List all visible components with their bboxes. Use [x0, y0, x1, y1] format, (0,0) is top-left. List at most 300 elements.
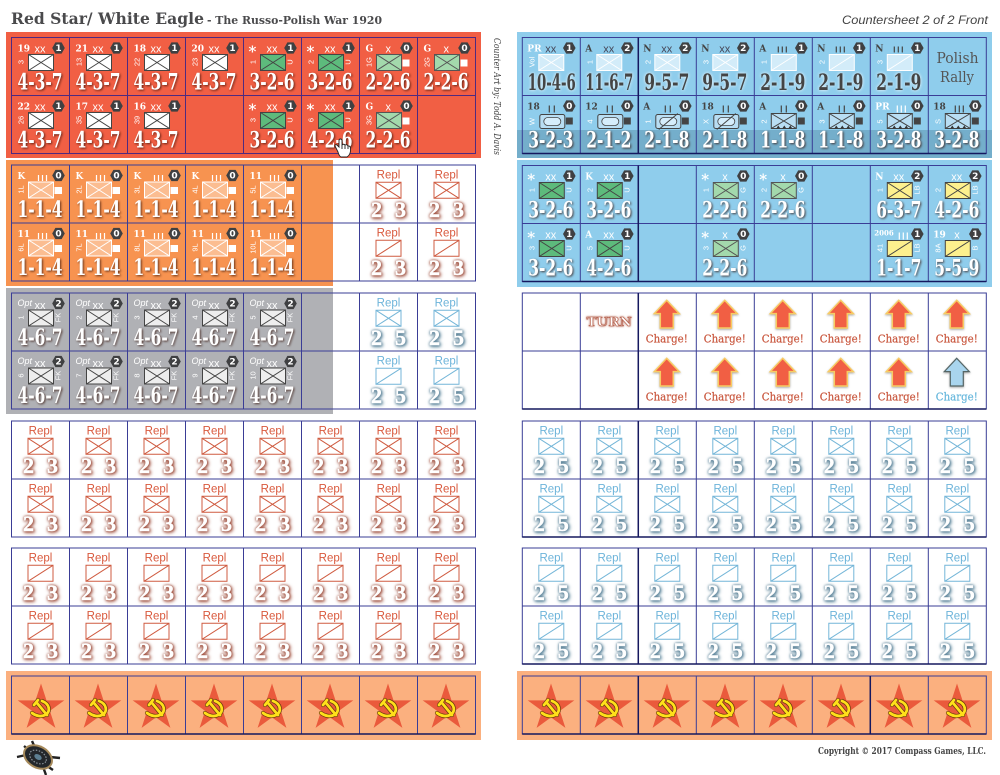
- counter: Opt 8: 2: [171, 358, 178, 368]
- counter: G 2G 2-2-6: 2G: [422, 57, 432, 67]
- counter: Polish Rally: Rally: [940, 68, 974, 86]
- panel: blue replacement counters, X box: 25: [766, 511, 801, 536]
- counter: A 5 4-2-6: 4-2-6: [586, 256, 631, 282]
- panel: blue replacement counters, X box: Repl: [539, 426, 563, 438]
- panel: blue replacement counters, slash box: Repl: [539, 552, 563, 564]
- counter: star 1 3-2-6: 3-2-6: [528, 198, 573, 224]
- marker: charge: [820, 300, 862, 346]
- counter: Opt 2: 2: [113, 300, 120, 310]
- panel: red replacement counters, slash box: 23: [139, 638, 174, 663]
- marker: charge: Charge!: [936, 333, 978, 346]
- sheet label: Countersheet 2 of 2 Front: [842, 13, 989, 27]
- counter: G 2G 2-2-6: x: [444, 44, 450, 56]
- counter: 11 9L: 1-1-4: [192, 255, 236, 281]
- counter: star 3 3-2-6: 1: [287, 102, 294, 112]
- counter: K 1L: 0: [55, 172, 62, 182]
- panel: red replacement counters, slash box: 23: [313, 580, 348, 605]
- counter: Opt 8: 4-6-7: [134, 383, 178, 409]
- panel: blue replacement counters, X box: 25: [708, 511, 743, 536]
- counter: 22 xx 4-3-7: 1: [55, 102, 62, 112]
- counter: K 4L: 4L: [190, 185, 200, 194]
- marker: charge: [762, 358, 804, 404]
- counter: G 3G 2-2-6: x: [386, 102, 392, 114]
- panel: red replacement counters, X box: Repl: [261, 426, 284, 438]
- counter: Opt 9: Opt: [192, 356, 207, 366]
- counter: 17 xx 4-3-7: 35: [74, 116, 84, 124]
- panel: red replacement counters, slash box: 23: [81, 580, 116, 605]
- counter: Opt 2: 2: [74, 315, 84, 320]
- panel: red replacement counters, X box: Repl: [261, 484, 284, 496]
- counter: star 6 4-2-6: [306, 100, 355, 154]
- panel: red replacement counters, X box: 23: [429, 453, 464, 478]
- counter: Opt 5: Opt: [250, 298, 265, 308]
- counter: G 2G 2-2-6: G: [424, 44, 431, 54]
- counter: 19 8A B 5-5-9: 8A: [933, 243, 942, 253]
- counter: A 2 1-1-8: A: [758, 102, 767, 112]
- counter: G 1G 2-2-6: [364, 42, 413, 96]
- counter: Opt 1: xx: [34, 300, 46, 312]
- counter: 11 10L: 1-1-4: [250, 255, 294, 281]
- counter: 17 xx 4-3-7: 4-3-7: [76, 128, 120, 154]
- counter: star 2 3-2-6: [306, 42, 355, 96]
- counter: Opt 7: [74, 356, 123, 409]
- panel: blue replacement counters, slash box: 25: [824, 638, 859, 663]
- counter: A 1 2-1-8: [642, 100, 692, 154]
- counter: A 1 2-1-8: A: [642, 102, 651, 112]
- counter: Opt 8: FK: [170, 371, 178, 380]
- counter: PR Vol 10-4-6: Vol: [527, 56, 536, 67]
- counter: star x 2 2-2-6: [759, 170, 808, 224]
- counter: 18 S 3-2-8: 18: [933, 102, 946, 112]
- counter: star 3 3-2-6: xx: [266, 102, 278, 114]
- panel: blue replacement counters, X box: Repl: [597, 426, 621, 438]
- artist credit: Counter Art by: Todd A. Davis: [491, 38, 502, 155]
- counter: N 1 LB 6-3-7: LB: [912, 185, 921, 195]
- panel: red replacement counters, X box: 23: [313, 511, 348, 536]
- counter: 18 xx 4-3-7: [132, 42, 181, 96]
- counter: 11 6L: 6L: [16, 243, 26, 252]
- counter: 2 LB 4-2-6: 2: [972, 172, 978, 182]
- counter: N 3 2-1-9: 1: [914, 44, 920, 54]
- counter: PR 5 3-2-8: 5: [875, 119, 884, 124]
- counter: PR 5 3-2-8: 0: [914, 102, 920, 112]
- counter: A 3 1-1-8: [816, 100, 866, 154]
- counter: A 2 1-1-8: 0: [798, 102, 804, 112]
- counter: 11 7L: 0: [113, 230, 120, 240]
- marker: charge: Charge!: [762, 391, 804, 404]
- panel: blue replacement counters, X box: Repl: [655, 484, 679, 496]
- counter: G 3G 2-2-6: 2-2-6: [366, 128, 410, 154]
- panel: red replacement counters, X box: 23: [23, 511, 58, 536]
- counter: star x 2 2-2-6: 2: [759, 188, 768, 192]
- panel: blue replacement counters, slash box: 25: [592, 638, 627, 663]
- counter: 11 6L: 11: [18, 230, 30, 240]
- counter: 19 xx 4-3-7: 4-3-7: [18, 70, 62, 96]
- counter: K 1L: 1L: [16, 185, 26, 194]
- counter: star x 3 2-2-6: 2-2-6: [702, 256, 747, 282]
- counter: PR Vol 10-4-6: [527, 42, 576, 96]
- panel: red replacement counters, X box: Repl: [87, 484, 110, 496]
- counter: 16 xx 4-3-7: 4-3-7: [134, 128, 178, 154]
- counter: star x 2 2-2-6: x: [780, 172, 786, 184]
- panel: red replacement counters, X box: 23: [197, 453, 232, 478]
- counter: 18 xx 4-3-7: xx: [150, 44, 162, 56]
- counter: star x 1 2-2-6: x: [722, 172, 728, 184]
- counter: N 2 2-1-9: 1: [856, 44, 862, 54]
- counter: star 1 3-2-6: U: [564, 187, 573, 193]
- panel: red replacement counters, X box: 23: [81, 511, 116, 536]
- counter: Opt 3: xx: [150, 300, 162, 312]
- marker: charge: Charge!: [820, 333, 862, 346]
- panel: red replacement counters, slash box: 23: [313, 638, 348, 663]
- counter: A 5 4-2-6: 1: [624, 230, 630, 240]
- panel: blue replacement counters, slash box: Repl: [829, 610, 853, 622]
- counter: 21 xx 4-3-7: 21: [76, 44, 88, 54]
- counter: 16 xx 4-3-7: xx: [150, 102, 162, 114]
- panel: blue replacement counters, X box: 25: [766, 453, 801, 478]
- counter: star 1 3-2-6: [527, 170, 576, 224]
- counter: 21 xx 4-3-7: 13: [74, 58, 84, 66]
- counter: 20 xx 4-3-7: 20: [192, 44, 204, 54]
- counter: K 2L: [74, 170, 123, 223]
- panel: blue replacement counters, slash box: Repl: [945, 610, 969, 622]
- marker: blue charge: Charge!: [936, 391, 978, 404]
- counter: 11 6L: 0: [55, 230, 62, 240]
- counter: star 1 3-2-6: 3-2-6: [250, 70, 294, 96]
- panel: red replacement counters, slash box: Repl: [319, 552, 342, 564]
- counter: star 3 3-2-6: 3: [248, 118, 258, 122]
- panel: red replacement counters, X box: 23: [139, 453, 174, 478]
- panel: blue replacement counters, X box: Repl: [887, 484, 911, 496]
- counter: 11 10L: 10L: [248, 241, 258, 254]
- counter: K 4L: 0: [229, 172, 236, 182]
- counter: N 1 LB 6-3-7: [875, 170, 924, 224]
- marker: charge: Charge!: [762, 333, 804, 346]
- counter: N 3 9-5-7: [701, 42, 750, 96]
- panel: blue replacement counters, X box: 25: [592, 511, 627, 536]
- counter: Opt 3: FK: [170, 313, 178, 322]
- panel: blue replacement counters, X box: Repl: [539, 484, 563, 496]
- counter: K 3L: 3L: [132, 185, 142, 194]
- counter: A 1 2-1-9: 1: [759, 60, 768, 64]
- counter: N 1 LB 6-3-7: 1: [875, 188, 884, 192]
- panel: red replacement counters, X box: Repl: [29, 484, 52, 496]
- panel: red replacement counters, X box: 23: [139, 511, 174, 536]
- counter: 18 X 2-1-8: [701, 100, 750, 154]
- panel: red replacement counters, slash box: 23: [255, 580, 290, 605]
- counter: 11 9L: 0: [229, 230, 236, 240]
- counter: K 2L: K: [76, 172, 84, 182]
- panel: blue replacement counters, X box: 25: [824, 453, 859, 478]
- counter: star 3 3-2-6: *: [248, 100, 256, 118]
- panel: blue replacement counters, X box: Repl: [713, 484, 737, 496]
- counter: blue replacement slash 2 5: Repl: [377, 356, 400, 368]
- counter: G 1G 2-2-6: 2-2-6: [366, 70, 410, 96]
- counter: star 1 3-2-6: 1: [248, 60, 258, 64]
- marker: turn: TURN: [587, 315, 632, 329]
- panel: blue replacement counters, slash box: 25: [534, 580, 569, 605]
- panel: blue Polish counters, top: [517, 32, 992, 158]
- panel: red replacement counters, X box: Repl: [435, 484, 458, 496]
- panel: blue replacement counters, X box: 25: [940, 453, 975, 478]
- counter: K 3L: 0: [171, 172, 178, 182]
- panel: red replacement counters, slash box: Repl: [261, 552, 284, 564]
- counter: 18 W 3-2-3: 3-2-3: [528, 128, 573, 154]
- panel: red replacement counters, slash box: Repl: [145, 552, 168, 564]
- counter: star x 3 2-2-6: 3: [701, 246, 710, 250]
- panel: blue replacement counters, slash box: 25: [708, 638, 743, 663]
- counter: Opt 2: FK: [112, 313, 120, 322]
- counter: 11 5L: [248, 170, 297, 223]
- counter: Opt 6: xx: [34, 358, 46, 370]
- panel: red replacement counters, X box: Repl: [435, 426, 458, 438]
- panel: blue replacement counters, slash box: Repl: [887, 610, 911, 622]
- counter: star 1 3-2-6: 1: [527, 188, 536, 192]
- counter: Opt 4: xx: [208, 300, 220, 312]
- counter: A 1 2-1-9: A: [758, 44, 767, 54]
- counter: K 2L: 0: [113, 172, 120, 182]
- counter: N 2 2-1-9: N: [817, 44, 826, 54]
- counter: 18 X 2-1-8: 0: [740, 102, 746, 112]
- counter: star 1 3-2-6: 1: [287, 44, 294, 54]
- counter: Opt 9: 9: [190, 373, 200, 378]
- counter: PR 5 3-2-8: [875, 100, 924, 154]
- counter: star x 2 2-2-6: *: [759, 170, 767, 188]
- counter: N 3 2-1-9: 2-1-9: [876, 70, 921, 96]
- panel: red replacement counters, X box: 23: [313, 453, 348, 478]
- counter: PR Vol 10-4-6: 1: [566, 44, 572, 54]
- title: - The Russo-Polish War 1920: [207, 14, 382, 27]
- counter: N 3 9-5-7: 3: [701, 60, 710, 64]
- counter: 20 xx 4-3-7: 4-3-7: [192, 70, 236, 96]
- counter: G 1G 2-2-6: x: [386, 44, 392, 56]
- counter: star x 1 2-2-6: *: [701, 170, 709, 188]
- counter: 11 8L: [132, 228, 181, 281]
- counter: 2 LB 4-2-6: 4-2-6: [934, 198, 979, 224]
- panel: red replacement counters, X box: Repl: [377, 426, 400, 438]
- panel: blue replacement counters, slash box: 25: [766, 580, 801, 605]
- counter: K 2L: 2L: [74, 185, 84, 194]
- counter: A 5 4-2-6: [584, 228, 634, 282]
- counter: 11 7L: 1-1-4: [76, 255, 120, 281]
- panel: blue replacement counters, X box: 25: [940, 511, 975, 536]
- panel: blue replacement counters, slash box: 25: [882, 638, 917, 663]
- counter: Opt 4: 4: [190, 315, 200, 320]
- panel: red replacement counters, slash box: Repl: [203, 610, 226, 622]
- counter: star x 3 2-2-6: G: [738, 245, 747, 251]
- counter: 21 xx 4-3-7: 1: [113, 44, 120, 54]
- marker: charge: [646, 358, 688, 404]
- panel: blue replacement counters, X box: [522, 421, 986, 537]
- panel: blue replacement counters, slash box: 25: [650, 638, 685, 663]
- panel: blue replacement counters, X box: Repl: [945, 426, 969, 438]
- counter: A 3 1-1-8: 1-1-8: [818, 128, 863, 154]
- panel: blue replacement counters, X box: Repl: [945, 484, 969, 496]
- counter: 18 X 2-1-8: 2-1-8: [702, 128, 747, 154]
- counter: 22 xx 4-3-7: 4-3-7: [18, 128, 62, 154]
- counter: 19 8A B 5-5-9: 1: [972, 230, 978, 240]
- counter: 19 xx 4-3-7: 19: [18, 44, 30, 54]
- counter: K 4L: [190, 170, 239, 223]
- counter: Opt 7: FK: [112, 371, 120, 380]
- counter: 19 xx 4-3-7: xx: [34, 44, 46, 56]
- counter: 2 LB 4-2-6: [933, 170, 982, 224]
- panel: blue replacement counters, slash box: Repl: [597, 610, 621, 622]
- panel: red replacement counters, slash box: 23: [23, 580, 58, 605]
- counter: 19 8A B 5-5-9: B: [970, 245, 979, 251]
- marker: charge: [704, 358, 746, 404]
- counter: A 1 2-1-8: 0: [682, 102, 688, 112]
- panel: blue replacement counters, slash box: Repl: [945, 552, 969, 564]
- counter: N 1 LB 6-3-7: 2: [914, 172, 920, 182]
- counter: Opt 3: 2: [171, 300, 178, 310]
- counter: N 3 9-5-7: 9-5-7: [702, 70, 747, 96]
- counter: N 2 2-1-9: 2: [817, 60, 826, 64]
- counter: Opt 8: 8: [132, 373, 142, 378]
- counter: 18 W 3-2-3: W: [527, 117, 536, 125]
- counter: Polish Rally: [936, 49, 979, 86]
- counter: 17 xx 4-3-7: xx: [92, 102, 104, 114]
- counter: 11 7L: [74, 228, 123, 281]
- counter: Opt 6: 4-6-7: [18, 383, 62, 409]
- counter: 2 LB 4-2-6: LB: [970, 185, 979, 195]
- counter: star x 3 2-2-6: 0: [740, 230, 746, 240]
- counter: replacement 2 3: [429, 170, 464, 222]
- counter: replacement 2 3: Repl: [435, 170, 458, 182]
- counter: blue replacement 2 5: 25: [371, 325, 406, 350]
- panel: red star markers, right: [517, 671, 992, 740]
- counter: Opt 6: [16, 356, 65, 409]
- counter: A 1 11-6-7: 11-6-7: [585, 70, 633, 96]
- counter: Opt 6: FK: [54, 371, 62, 380]
- counter: Opt 1: FK: [54, 313, 62, 322]
- counter: star 3 3-2-6: [527, 228, 576, 282]
- counter: Opt 5: 4-6-7: [250, 325, 294, 351]
- counter: star x 1 2-2-6: G: [738, 187, 747, 193]
- counter: A 1 11-6-7: [584, 42, 634, 96]
- panel: blue replacement counters, slash box: Repl: [713, 610, 737, 622]
- panel: blue replacement counters, slash box: Repl: [771, 552, 795, 564]
- counter: N 3 9-5-7: xx: [719, 44, 731, 56]
- counter: 18 xx 4-3-7: 1: [171, 44, 178, 54]
- counter: Opt 4: [190, 298, 239, 351]
- panel: red replacement counters, slash box: Repl: [29, 552, 52, 564]
- counter: Opt 4: 4-6-7: [192, 325, 236, 351]
- counter: star x 3 2-2-6: [701, 228, 750, 282]
- counter: 11 9L: 9L: [190, 243, 200, 252]
- counter: A 2 1-1-8: 1-1-8: [760, 128, 805, 154]
- counter: 12 4 2-1-2: 12: [585, 102, 598, 112]
- counter: replacement slash 2 3: Repl: [435, 228, 458, 240]
- counter: N 3 9-5-7: N: [701, 44, 710, 54]
- icon: hand cursor: [335, 139, 350, 157]
- counter: Opt 8: Opt: [134, 356, 149, 366]
- marker: charge: Charge!: [704, 391, 746, 404]
- counter: Opt 5: 2: [287, 300, 294, 310]
- panel: blue allied counters: [517, 160, 992, 287]
- counter: star 2 3-2-6: U: [344, 59, 352, 65]
- counter: K 2 3-2-6: [585, 170, 634, 224]
- counter: Opt 10: 10: [248, 371, 258, 380]
- counter: A 1 11-6-7: 2: [624, 44, 630, 54]
- marker: charge: [646, 300, 688, 346]
- counter: 2006 41 LB 1-1-7: LB: [912, 243, 921, 253]
- panel: red replacement counters, slash box: Repl: [377, 610, 400, 622]
- counter: K 4L: 1-1-4: [192, 197, 236, 223]
- counter: star 6 4-2-6: 4-2-6: [308, 128, 352, 154]
- panel: orange cavalry counters and replacements: [6, 160, 476, 286]
- title: Red Star/ White Eagle: [11, 9, 204, 28]
- counter: PR 5 3-2-8: PR: [875, 102, 890, 112]
- counter: Opt 5: xx: [266, 300, 278, 312]
- counter: A 1 2-1-9: 1: [798, 44, 804, 54]
- counter: replacement 2 3: Repl: [377, 170, 400, 182]
- counter: 2006 41 LB 1-1-7: [874, 228, 924, 282]
- counter: K 2L: 1-1-4: [76, 197, 120, 223]
- counter: star 2 3-2-6: 2: [306, 60, 316, 64]
- counter: A 3 1-1-8: A: [816, 102, 825, 112]
- panel: red replacement counters, slash box: 23: [255, 638, 290, 663]
- counter: Opt 9: 2: [229, 358, 236, 368]
- counter: G 3G 2-2-6: 0: [403, 102, 410, 112]
- counter: 17 xx 4-3-7: [74, 100, 123, 154]
- marker: charge: [878, 358, 920, 404]
- counter: Opt 7: 7: [74, 373, 84, 378]
- counter: 16 xx 4-3-7: 39: [132, 116, 142, 124]
- counter: 22 xx 4-3-7: [16, 100, 65, 154]
- counter: N 2 2-1-9: 2-1-9: [818, 70, 863, 96]
- panel: blue replacement counters, X box: 25: [534, 511, 569, 536]
- panel: blue replacement counters, X box: 25: [708, 453, 743, 478]
- counter: Opt 10: [248, 356, 297, 409]
- counter: star 6 4-2-6: xx: [324, 102, 336, 114]
- panel: blue replacement counters, slash box: 25: [766, 638, 801, 663]
- counter: 18 S 3-2-8: 3-2-8: [934, 128, 979, 154]
- counter: K 3L: K: [134, 172, 142, 182]
- counter: blue replacement slash 2 5: [429, 356, 464, 408]
- counter: star x 1 2-2-6: 0: [740, 172, 746, 182]
- counter: 12 4 2-1-2: 4: [585, 119, 594, 124]
- panel: red replacement counters, X box: [12, 421, 476, 537]
- counter: star 1 3-2-6: xx: [266, 44, 278, 56]
- counter: K 2 3-2-6: xx: [603, 172, 615, 184]
- counter: N 2 9-5-7: 9-5-7: [644, 70, 689, 96]
- counter: Opt 4: Opt: [192, 298, 207, 308]
- panel: blue replacement counters, slash box: 25: [940, 580, 975, 605]
- counter: Opt 7: 4-6-7: [76, 383, 120, 409]
- counter: 12 4 2-1-2: 0: [624, 102, 630, 112]
- counter: N 2 9-5-7: N: [643, 44, 652, 54]
- counter: star 1 3-2-6: [248, 42, 297, 96]
- counter: N 2 9-5-7: xx: [661, 44, 673, 56]
- panel: red replacement counters, X box: Repl: [145, 426, 168, 438]
- panel: blue replacement counters, slash box: 25: [824, 580, 859, 605]
- counter: star 6 4-2-6: 6: [306, 118, 316, 122]
- panel: blue replacement counters, X box: 25: [882, 453, 917, 478]
- title: [11, 9, 382, 28]
- counter: 11 9L: 11: [192, 230, 204, 240]
- panel: blue replacement counters, X box: 25: [824, 511, 859, 536]
- panel: blue replacement counters, slash box: Repl: [887, 552, 911, 564]
- counter: K 2 3-2-6: 1: [624, 172, 630, 182]
- panel: blue replacement counters, X box: Repl: [829, 426, 853, 438]
- counter: blue replacement 2 5: [429, 298, 464, 350]
- panel: blue replacement counters, X box: Repl: [887, 426, 911, 438]
- counter: 19 8A B 5-5-9: 19: [933, 230, 946, 240]
- counter: A 5 4-2-6: xx: [603, 230, 615, 242]
- counter: Opt 10: FK: [286, 371, 294, 380]
- marker: charge: Charge!: [878, 333, 920, 346]
